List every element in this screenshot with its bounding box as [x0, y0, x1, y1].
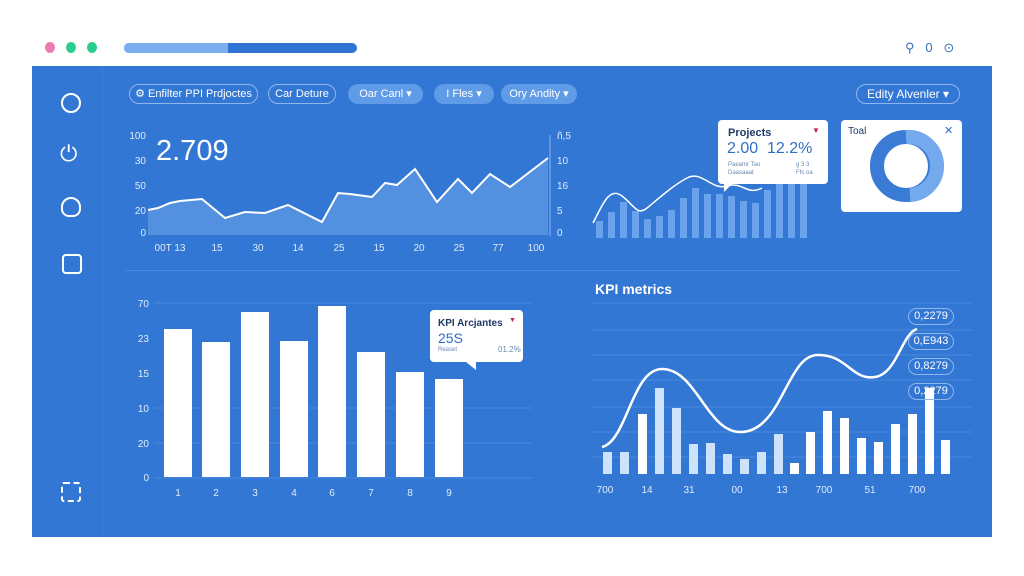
window dots [45, 42, 97, 53]
value pills: 0,2279 [914, 310, 948, 322]
bottom bar chart: 4 [291, 488, 297, 499]
top line chart: 25 [333, 243, 345, 254]
top bar chart [592, 175, 807, 238]
bottom bar chart: 0 [143, 473, 149, 484]
bottom bar chart: 23 [138, 334, 149, 345]
top line chart: 77 [492, 243, 504, 254]
top line chart: 50 [135, 181, 146, 192]
bottom right chart: 31 [683, 485, 695, 496]
bottom right chart: 700 [816, 485, 833, 496]
top line chart: 5 [557, 206, 563, 217]
icon: box [62, 254, 82, 274]
big number: 2.709 [156, 135, 229, 167]
bottom right chart: 00 [731, 485, 743, 496]
filter pills: Car Deture [275, 88, 329, 100]
filter pills [129, 84, 577, 104]
card: projects: Daasaaat [728, 170, 754, 176]
heading: KPI metrics: KPI metrics [595, 281, 672, 297]
tooltip: KPI: 01.2% [498, 345, 521, 354]
card: projects: Paeamr Tao [728, 162, 760, 168]
bottom right chart: 700 [597, 485, 614, 496]
icon: expand [61, 482, 81, 502]
bottom bar chart: 15 [138, 369, 149, 380]
top line chart: 20 [135, 206, 146, 217]
value pills: 0,E943 [914, 335, 948, 347]
bottom bar chart: 3 [252, 488, 258, 499]
bottom bar chart: 8 [407, 488, 413, 499]
bottom right chart: 51 [864, 485, 876, 496]
icon: cloud [61, 197, 81, 217]
top line chart: ñ,5 [557, 131, 571, 142]
filter pills: Oar Canl ▾ [359, 88, 412, 100]
top line chart: 16 [557, 181, 569, 192]
bottom right chart: 700 [909, 485, 926, 496]
top line chart: 30 [252, 243, 264, 254]
bottom bar chart: 2 [213, 488, 219, 499]
top line chart: 0 [557, 228, 563, 239]
tooltip: KPI: KPI Arcjantes [438, 318, 503, 329]
top line chart: 15 [373, 243, 385, 254]
sidebar [32, 66, 103, 537]
bottom right chart: 13 [776, 485, 788, 496]
card: donut: Toal [848, 126, 866, 137]
top line chart: 100 [528, 243, 545, 254]
tooltip: KPI: Reaset [438, 347, 457, 353]
top line chart: 15 [211, 243, 223, 254]
top line chart: 00T 13 [155, 243, 186, 254]
card: projects: g 3 3 [796, 162, 809, 168]
bottom bar chart: 70 [138, 299, 149, 310]
card: projects: Projects [728, 127, 771, 139]
top line chart: 10 [557, 156, 569, 167]
dropdown: Edity Alvenler ▾ [867, 87, 949, 101]
bottom bar chart: 1 [175, 488, 181, 499]
value pills: 0,8279 [914, 360, 948, 372]
card: projects [718, 120, 828, 184]
top line chart: 100 [129, 131, 146, 142]
divider [125, 270, 960, 271]
bottom bar chart [138, 299, 532, 499]
top right icons: ⚲ 0 ⊙ [905, 40, 954, 55]
bottom bar chart: 10 [138, 404, 149, 415]
card: projects: ▼ [812, 126, 820, 135]
value pills: 0,2279 [914, 385, 948, 397]
top line chart: 30 [135, 156, 146, 167]
card: projects: Ffc oa [796, 170, 813, 176]
value pills [908, 308, 954, 400]
top line chart: 20 [413, 243, 425, 254]
dropdown [856, 84, 960, 104]
top line chart: 14 [292, 243, 304, 254]
bottom bar chart: 9 [446, 488, 452, 499]
tooltip: KPI: 25S [438, 330, 463, 346]
filter pills: Ory Andity ▾ [509, 88, 569, 100]
card: donut [841, 120, 962, 212]
bottom bar chart: 6 [329, 488, 335, 499]
card: donut: ✕ [944, 125, 953, 137]
bottom bar chart: 20 [138, 439, 149, 450]
bottom right chart [592, 302, 972, 496]
filter pills: I Fles ▾ [446, 88, 482, 100]
icon: power: ⏻ [60, 141, 77, 166]
tooltip: KPI: ▼ [509, 317, 516, 324]
bottom bar chart: 7 [368, 488, 374, 499]
top line chart: 0 [140, 228, 146, 239]
icon: circle [61, 93, 81, 113]
progress bar [124, 43, 357, 53]
bottom right chart: 14 [641, 485, 653, 496]
top line chart: 25 [453, 243, 465, 254]
card: projects: 2.00 12.2% [727, 140, 812, 157]
filter pills: ⚙ Enfilter PPI Prdjoctes [135, 88, 252, 100]
tooltip: KPI [430, 310, 523, 362]
main panel [32, 66, 992, 537]
